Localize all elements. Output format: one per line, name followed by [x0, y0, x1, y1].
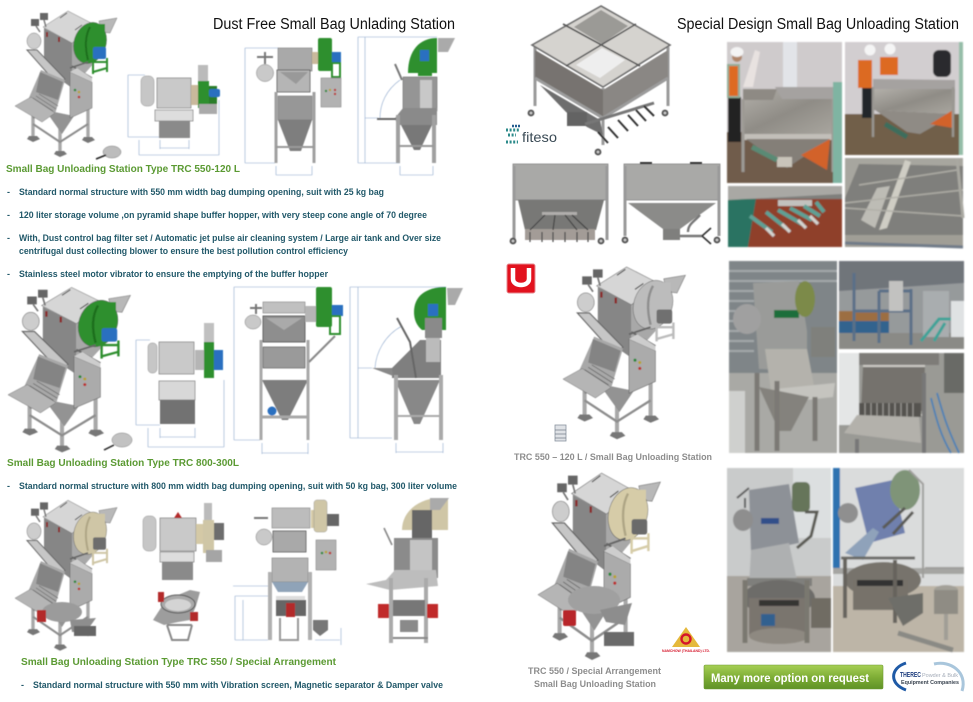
icon: small data plate: [555, 425, 566, 441]
heading: TRC 800-300L: Small Bag Unloading Station Type TRC 800-300L: [7, 457, 240, 469]
bullet list: TRC 550-120 L: Standard normal structure with 550 mm width bag dumping opening, suit with 25 kg bag: [19, 187, 384, 197]
bullet list: TRC 550-120 L: -: [7, 187, 10, 197]
logo: THEREC: THEREC: [900, 672, 921, 679]
caption: TRC 550 120 L: TRC 550 – 120 L / Small Bag Unloading Station: [514, 452, 712, 463]
bullet list: TRC 550-120 L: [7, 187, 441, 279]
title: left column: Dust Free Small Bag Unlading Station: [213, 16, 455, 33]
photo: open dumping hatch: [838, 352, 965, 454]
photo: worker with hopper: [726, 42, 843, 184]
caption: TRC 550 special: TRC 550 / Special Arrangement: [528, 666, 662, 677]
logo: fiteso: [506, 126, 557, 145]
logo: Namchow: [662, 627, 710, 653]
bullet list: TRC 550-120 L: centrifugal dust collecting blower to ensure the best pollution control efficiency: [19, 246, 348, 256]
3D view: TRC 550 special arrangement with fan: [538, 473, 660, 660]
bullet list: TRC 550-120 L: 120 liter storage volume ,on pyramid shape buffer hopper, with very steep cone angle of 70 degree: [19, 210, 427, 220]
top view drawing: [128, 65, 220, 155]
logo: THEREC: Equipment Companies: [901, 680, 959, 686]
photo: plant overview: [838, 260, 965, 350]
heading: TRC 550 special: Small Bag Unloading Station Type TRC 550 / Special Arrangement: [21, 656, 336, 668]
logo: THEREC: Powder & Bulk: [922, 673, 958, 679]
bullet list: TRC 550-120 L: -: [7, 233, 10, 243]
3D view: TRC 550-120 L: [15, 11, 117, 157]
logo: fiteso: fiteso: [522, 129, 557, 145]
photo: bag filter mesh: [844, 157, 966, 250]
bullet list: TRC 550-120 L: -: [7, 210, 10, 220]
icon: motor vibrator: [96, 146, 121, 159]
side view drawing: [350, 287, 463, 453]
photo: installed station with green blower: [728, 260, 838, 454]
bullet: TRC 550 special: Standard normal structure with 550 mm with Vibration screen, Magnetic separator & Damper valve: [33, 680, 443, 690]
title: right column: Special Design Small Bag Unloading Station: [677, 16, 959, 33]
front view drawing: [245, 38, 341, 175]
bullet list: TRC 550-120 L: Stainless steel motor vibrator to ensure the emptying of the buffer hopper: [19, 269, 328, 279]
bullet: TRC 800-300L: -: [7, 481, 10, 491]
sieve and red motor on 3D view: [37, 602, 96, 636]
side view drawing: [366, 498, 449, 643]
panel: TRC 550-120 L drawings: [15, 11, 455, 175]
photo: special arrangement front: [726, 468, 832, 653]
front elevation: hopper: [510, 164, 608, 244]
3D view: TRC 550 special: [15, 500, 117, 651]
logo: United: [507, 264, 535, 293]
panel: TRC 550 special arrangement drawings: [15, 498, 449, 651]
logo: Namchow: NAMCHOW (THAILAND) LTD.: [662, 648, 710, 653]
button: many more option on request: [704, 665, 883, 689]
icon: motor vibrator: [104, 433, 132, 450]
bullet: TRC 550 special: -: [21, 680, 24, 690]
3D view: TRC 550 120 L United: [563, 267, 685, 439]
panel: TRC 800-300L drawings: [8, 287, 463, 454]
side elevation: hopper: [622, 163, 720, 244]
3D view: TRC 800-300L: [8, 287, 130, 452]
logo: THEREC: [894, 663, 963, 691]
caption: TRC 550 special: [528, 666, 662, 690]
heading: TRC 550-120 L: Small Bag Unloading Station Type TRC 550-120 L: [6, 163, 241, 175]
caption: TRC 550 special: Small Bag Unloading Station: [534, 679, 656, 690]
photo: special arrangement side: [832, 466, 965, 653]
icon: vibration screen: [153, 590, 200, 640]
photo: outlet manifold: [726, 185, 844, 248]
front view drawing: [233, 500, 341, 645]
panel: multi-outlet hopper 3D view: [528, 6, 670, 155]
top view drawing: [143, 503, 224, 580]
side view drawing: [358, 37, 455, 175]
front view drawing: [234, 287, 343, 454]
photo: two workers with hopper: [844, 41, 964, 156]
bullet list: TRC 550-120 L: With, Dust control bag filter set / Automatic jet pulse air cleaning system / Large air tank and Over size: [19, 233, 441, 243]
bullet list: TRC 550-120 L: -: [7, 269, 10, 279]
top view drawing: [136, 323, 224, 447]
bullet: TRC 800-300L: Standard normal structure with 800 mm width bag dumping opening, suit with 50 kg bag, 300 liter volume: [19, 481, 457, 491]
button: many more option on request: Many more option on request: [711, 673, 869, 685]
